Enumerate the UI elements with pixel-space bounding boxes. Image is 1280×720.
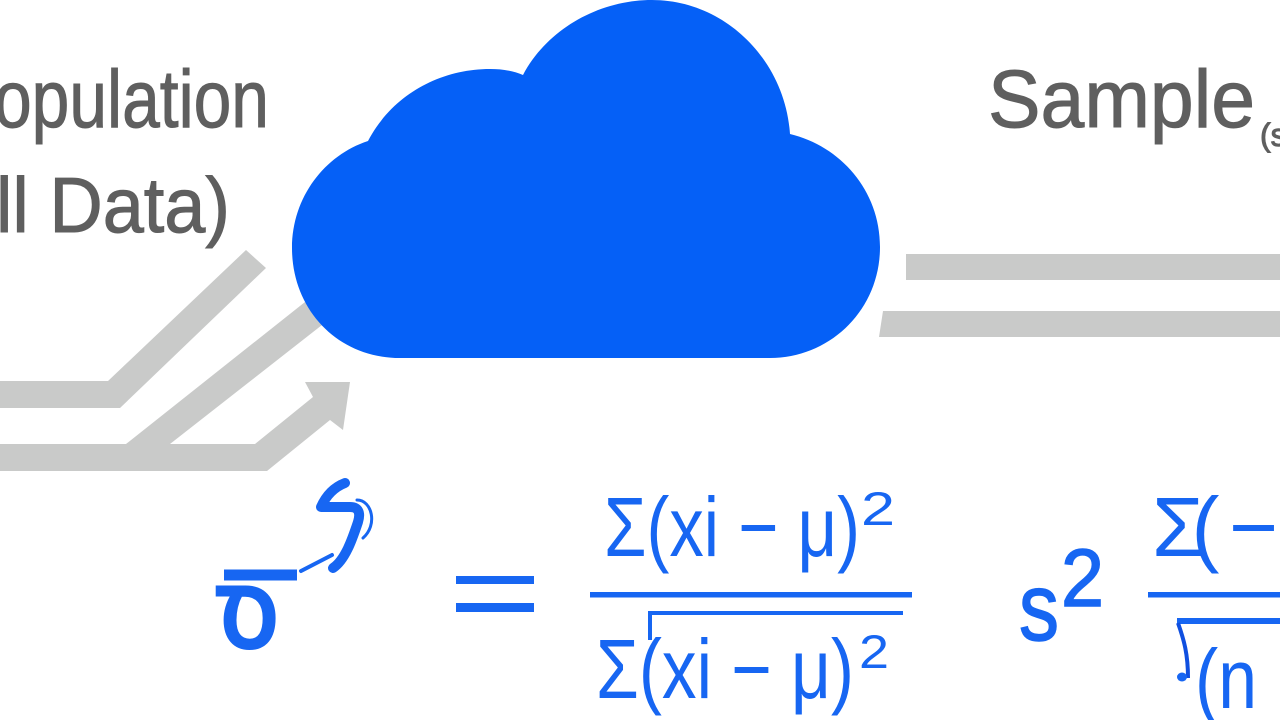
radical overline — [650, 613, 903, 640]
s exponent: 2 — [1061, 533, 1104, 624]
arrows: sample output bars — [879, 254, 1280, 337]
numerator exponent: 2 — [861, 482, 895, 535]
fraction bar — [590, 592, 912, 598]
all data note: ll Data) — [0, 161, 230, 249]
arrows: population data flowing into the cloud — [0, 250, 350, 471]
numerator: Σ( − — [1152, 480, 1278, 574]
numerator: Σ(xi − μ) — [604, 480, 860, 574]
upper input bar — [0, 250, 266, 408]
lower input bar with arrowhead — [0, 302, 350, 471]
denominator: Σ(xi − μ) — [596, 622, 854, 716]
heading: population label — [0, 54, 269, 249]
radical sign — [1177, 621, 1280, 682]
s symbol: s — [1019, 554, 1059, 661]
sample word: Sample — [988, 54, 1255, 145]
formula: sample variance — [1019, 480, 1280, 720]
icon: cloud — [292, 0, 880, 358]
lower output bar — [879, 311, 1280, 337]
sigma symbol: σ — [216, 546, 278, 671]
equals sign — [456, 576, 534, 612]
sigma exponent stroke — [224, 483, 372, 575]
fraction bar — [1148, 592, 1280, 598]
heading: sample label — [988, 54, 1280, 153]
denominator exponent: 2 — [859, 625, 889, 678]
population word: opulation — [0, 54, 269, 145]
formula: population variance — [216, 480, 912, 716]
upper output bar — [906, 254, 1280, 280]
